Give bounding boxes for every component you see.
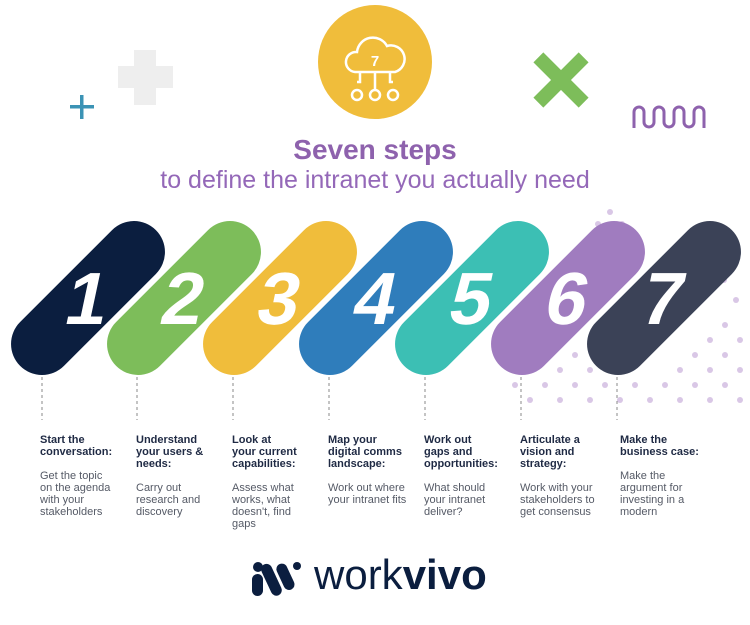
- icon: purple squiggle: [634, 107, 704, 128]
- dot pattern: [512, 209, 743, 403]
- step 3 text: works, what: [232, 494, 290, 506]
- step 6 text: Articulate a: [520, 434, 580, 446]
- step 7 text: Make the: [620, 434, 667, 446]
- step 4 text: your intranet fits: [328, 494, 406, 506]
- icon: green cross: [516, 35, 606, 125]
- pill 3: 3: [251, 257, 309, 340]
- icon: yellow circle with cloud: [318, 5, 432, 119]
- step 7 text: investing in a: [620, 494, 684, 506]
- pill 7: [574, 208, 750, 388]
- pill 5: 5: [443, 257, 501, 340]
- step 1 text: Get the topic: [40, 470, 102, 482]
- pill 2: 2: [155, 257, 213, 340]
- step 6 text: strategy:: [520, 458, 566, 470]
- step 5 text: opportunities:: [424, 458, 498, 470]
- step 4 text: Map your: [328, 434, 377, 446]
- step 2 text: your users &: [136, 446, 203, 458]
- step 3 text: your current: [232, 446, 297, 458]
- step 3 text: [232, 434, 297, 530]
- step 4 text: [328, 434, 406, 506]
- icon: logo mark: [252, 562, 301, 596]
- pill 5: [382, 208, 562, 388]
- step 3 text: Assess what: [232, 482, 294, 494]
- pill 2: [94, 208, 274, 388]
- pill 7: 7: [635, 257, 693, 340]
- step 6 text: stakeholders to: [520, 494, 595, 506]
- step 4 text: landscape:: [328, 458, 385, 470]
- step 6 text: [520, 434, 595, 518]
- subtitle: to define the intranet you actually need: [160, 166, 590, 194]
- step 5 text: deliver?: [424, 506, 463, 518]
- pill 1: [0, 208, 178, 388]
- logo: [252, 551, 487, 598]
- step 1 text: on the agenda: [40, 482, 110, 494]
- step 5 text: [424, 434, 498, 518]
- pill 4: 4: [347, 257, 406, 340]
- step 3 text: capabilities:: [232, 458, 296, 470]
- step 5 text: your intranet: [424, 494, 485, 506]
- step 2 text: Understand: [136, 434, 197, 446]
- step 2 text: research and: [136, 494, 200, 506]
- step 4 text: digital comms: [328, 446, 402, 458]
- step 7 text: argument for: [620, 482, 682, 494]
- step 6 text: get consensus: [520, 506, 591, 518]
- step 3 text: doesn't, find: [232, 506, 291, 518]
- step 1 text: [40, 434, 112, 518]
- pill 6: 6: [539, 257, 597, 340]
- step 2 text: discovery: [136, 506, 182, 518]
- step 7 text: business case:: [620, 446, 699, 458]
- step 7 text: Make the: [620, 470, 665, 482]
- icon: teal plus: [70, 95, 94, 119]
- step 6 text: vision and: [520, 446, 574, 458]
- pills chart: [11, 221, 741, 420]
- step 7 text: [620, 434, 699, 518]
- title: Seven steps: [293, 134, 457, 165]
- step 2 text: [136, 434, 203, 518]
- step 4 text: Work out where: [328, 482, 405, 494]
- logo text: workvivo: [314, 551, 487, 598]
- step 1 text: conversation:: [40, 446, 112, 458]
- step 1 text: stakeholders: [40, 506, 102, 518]
- step 7 text: modern: [620, 506, 657, 518]
- icon: yellow circle with cloud: 7: [371, 53, 379, 70]
- step 6 text: Work with your: [520, 482, 593, 494]
- step 2 text: Carry out: [136, 482, 181, 494]
- pill 4: [286, 208, 466, 388]
- step 3 text: gaps: [232, 518, 256, 530]
- step 3 text: Look at: [232, 434, 271, 446]
- icon: grey plus: [118, 50, 173, 105]
- step 5 text: What should: [424, 482, 485, 494]
- step 5 text: gaps and: [424, 446, 472, 458]
- step 1 text: Start the: [40, 434, 85, 446]
- step 1 text: with your: [40, 494, 84, 506]
- step 2 text: needs:: [136, 458, 171, 470]
- step 5 text: Work out: [424, 434, 471, 446]
- pill 3: [190, 208, 370, 388]
- pill 1: 1: [59, 257, 117, 340]
- pill 6: [478, 208, 658, 388]
